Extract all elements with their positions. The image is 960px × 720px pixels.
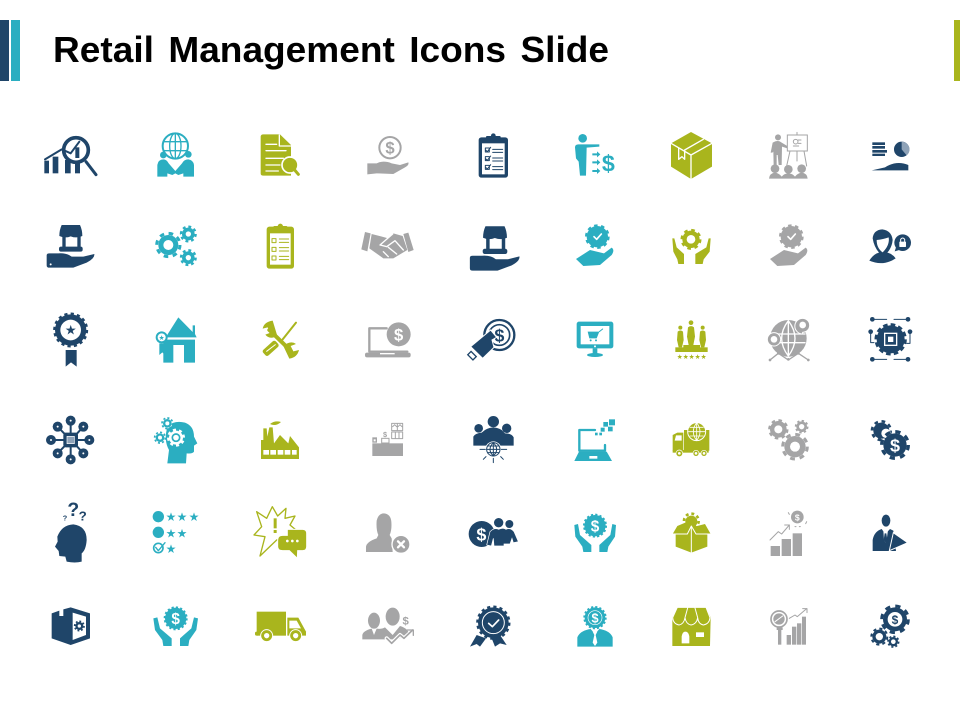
icon: team on podium with stars: ★★★★★: [677, 353, 707, 361]
icon: hands with dollar badge (row 5): $: [591, 518, 600, 535]
icon: chart with magnifier: [44, 138, 96, 175]
icon: olive clipboard checklist: [267, 224, 294, 269]
icon: hand holding dollar coin: $: [385, 139, 395, 158]
icon: delivery truck: [255, 612, 306, 642]
icon: gears with dollar: $: [890, 435, 900, 455]
icon: house with badge: [156, 317, 197, 363]
icon: rating dots and stars: [153, 510, 199, 556]
icon: verified rosette: [470, 607, 509, 647]
icon: award badge with star: ★: [65, 323, 77, 338]
icon: box with gear panel: [52, 607, 90, 645]
icon: house with badge: ★: [159, 334, 165, 342]
icon: businessman with megaphone: [873, 515, 908, 551]
icon: person pointing to dollar: [575, 134, 615, 176]
icon: hands with dollar badge: [153, 607, 198, 646]
icon: presenter and audience: [769, 132, 808, 179]
icon: person with lock: [869, 229, 911, 263]
icon: monitor with cart: [577, 322, 613, 357]
icon: gray gears: [769, 420, 808, 459]
icon: gears with dollar: [872, 421, 908, 458]
icon: person removed: [366, 513, 410, 553]
icon: person pointing to dollar: $: [602, 150, 615, 176]
icon: brain chip circuit: [868, 317, 912, 362]
icon grid: rows 1 to 3, left columns: [44, 133, 414, 367]
icon: globe and people: [157, 133, 194, 177]
icon: wrench and screwdriver: [261, 321, 299, 359]
icon: factory: [261, 421, 299, 459]
title: Retail Management Icons Slide: [53, 29, 609, 70]
icon: magnifier with growth bars: [771, 609, 807, 645]
icon: rating dots and stars: ★: [166, 542, 176, 556]
icon: award badge with star: [54, 314, 87, 367]
icon grid: rows 4 to 6, right columns: [469, 416, 908, 647]
header accent bar right: [954, 20, 960, 81]
icon: gears with dollar (row 6): $: [892, 613, 899, 627]
icon: rating dots and stars: ★★: [166, 526, 187, 540]
icon: hands with gear: [672, 230, 711, 264]
icon: team on podium with stars: [675, 320, 708, 361]
icon: growth bars with dollar: $: [795, 512, 800, 522]
icon: dollar and team: [469, 518, 518, 547]
icon: business people with trend: [362, 608, 413, 643]
icon: store on hand (navy): [470, 226, 519, 271]
icon: laptop with dollar: [365, 322, 411, 357]
icon: store on hand: [47, 225, 94, 268]
icon: box with gear: [673, 514, 711, 553]
icon grid: rows 4 to 6, left columns: [46, 416, 413, 646]
icon: global team: [473, 416, 514, 463]
icon: truck with globe: [673, 423, 709, 457]
icon: burst alert with speech bubble: [254, 507, 307, 558]
icon: warehouse goods: [372, 423, 403, 456]
icon: hand with verified badge (teal): [576, 225, 613, 266]
icon: dollar and team: $: [476, 525, 486, 545]
icon: head with question marks: [55, 500, 87, 562]
icon: person with dollar head: [577, 607, 613, 647]
icon: handshake: [361, 232, 414, 258]
icon: gears with dollar (row 6): [871, 606, 908, 647]
icon: globe with location pins: [767, 318, 810, 361]
icon: hub network: [46, 416, 94, 464]
header accent bars left: [0, 20, 20, 81]
icon: head with question marks: ?: [63, 514, 68, 523]
icon: warehouse goods: $: [383, 430, 387, 439]
icon: head with question marks: ?: [67, 500, 79, 521]
icon: navy clipboard checklist: [479, 133, 508, 178]
icon: growth bars with dollar: [770, 511, 807, 556]
icon: hand with verified badge (gray): [770, 225, 807, 266]
icon: laptop with pixels: [574, 419, 615, 461]
icon: cardboard box: [671, 132, 712, 179]
icon: head with question marks: ?: [79, 509, 87, 524]
icon: finger pressing dollar: [468, 320, 514, 360]
icon: storefront: [672, 607, 711, 646]
icon: hands with dollar badge: $: [171, 611, 180, 628]
icon: rating dots and stars: ★★★: [166, 510, 199, 524]
icon: head with gears: [155, 418, 197, 463]
icon: hand holding dollar coin: [367, 137, 409, 174]
icon: person with dollar head: $: [591, 611, 599, 625]
icon: business people with trend: $: [403, 616, 410, 628]
icon grid: rows 1 to 3, right columns: [468, 132, 912, 362]
icon: document with magnifier: [261, 134, 298, 176]
icon: list, pie and hill: [872, 142, 910, 170]
icon: finger pressing dollar: $: [494, 326, 504, 346]
icon: hands with dollar badge (row 5): [574, 515, 616, 552]
icon: laptop with dollar: $: [394, 325, 404, 344]
icon: three gears: [157, 227, 196, 265]
